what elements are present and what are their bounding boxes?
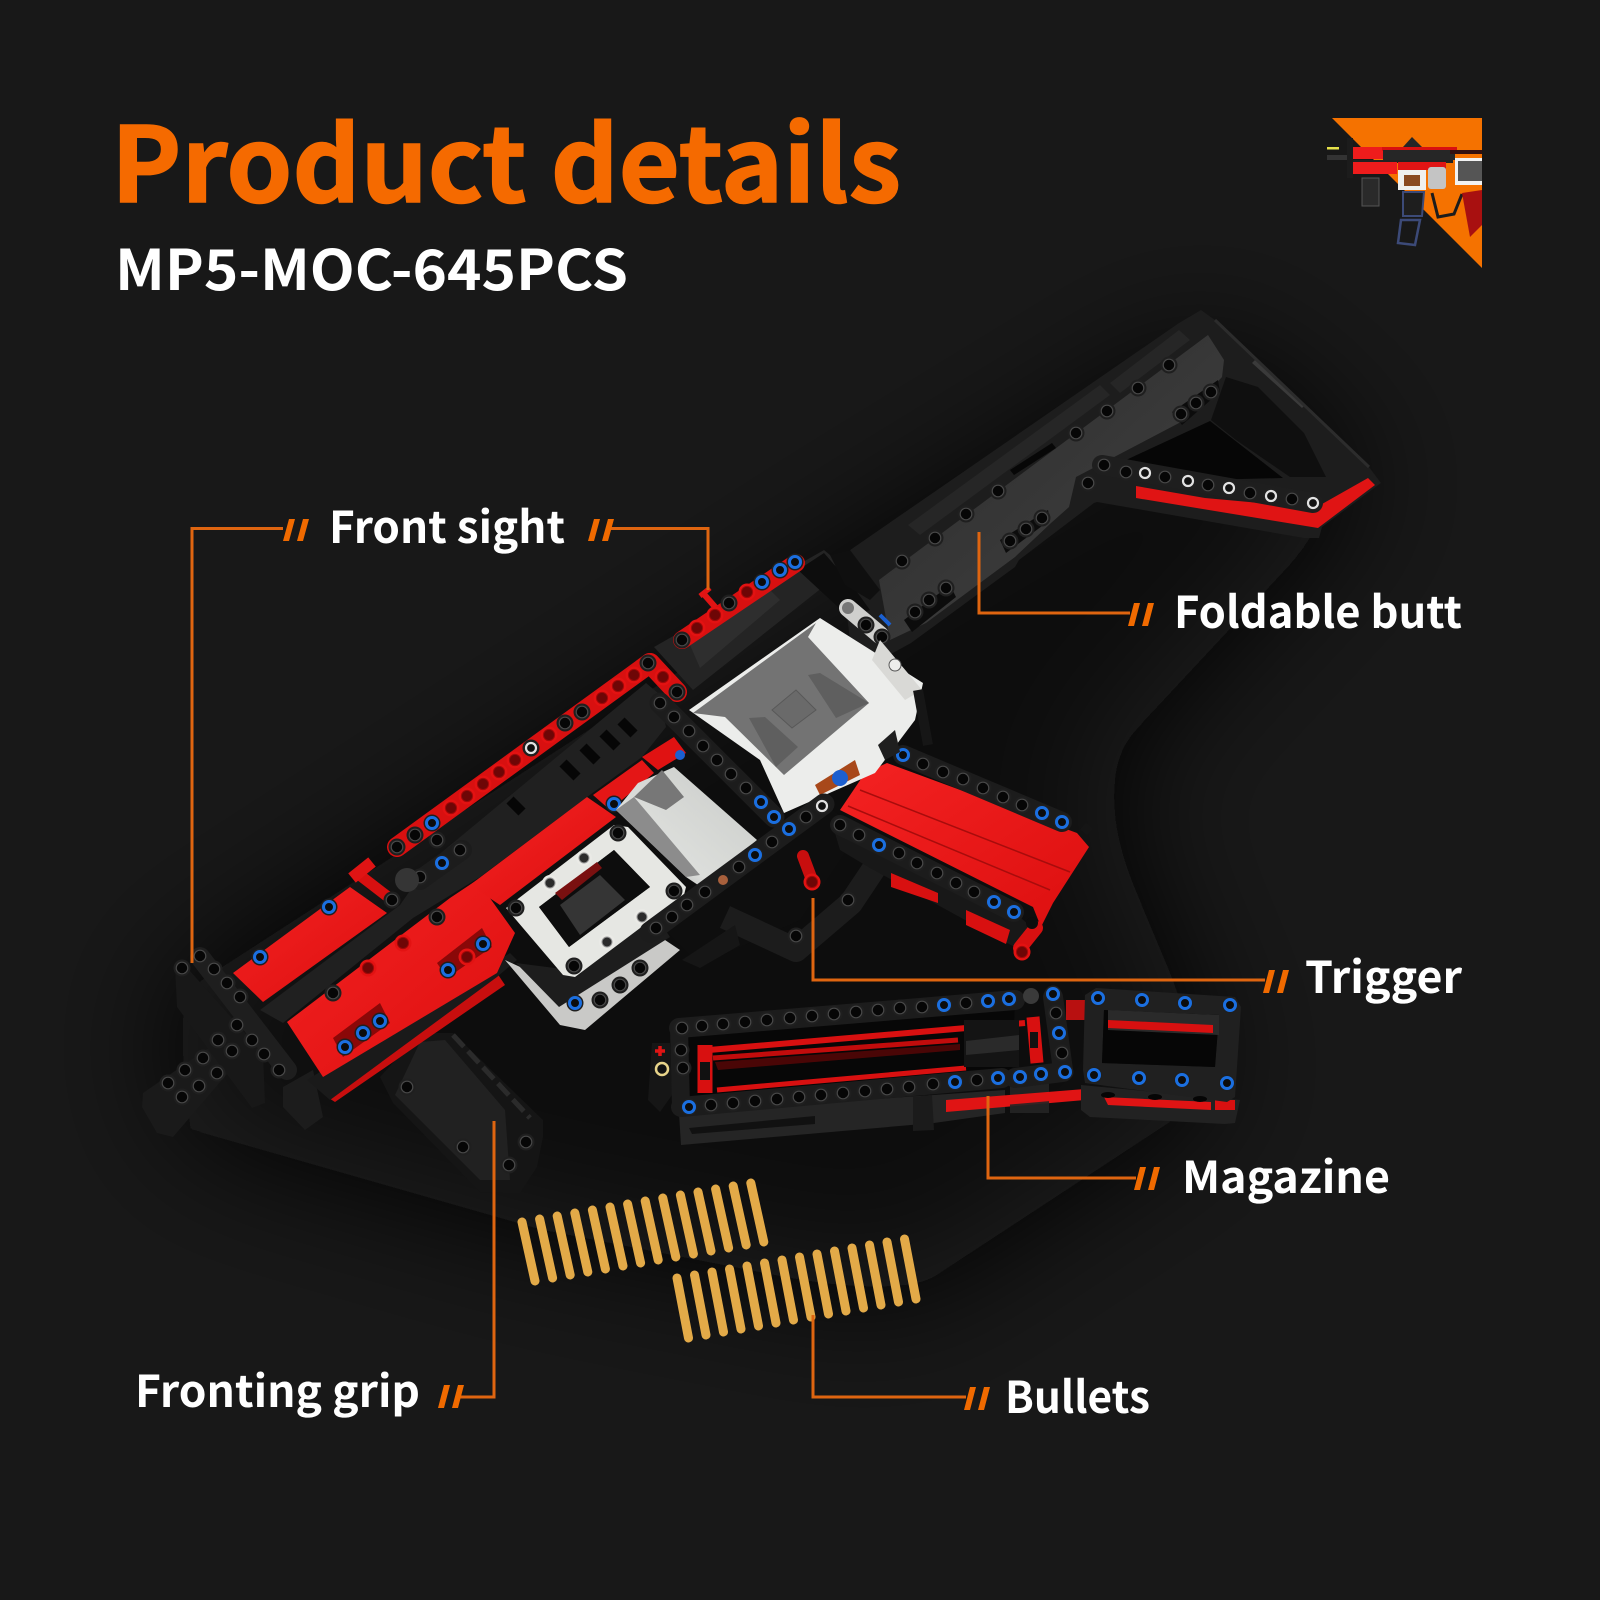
pin bracket above battery — [842, 602, 928, 745]
red rear body — [470, 737, 686, 905]
callout: Fronting grip — [135, 1121, 494, 1420]
callout: Bullets — [813, 1315, 1150, 1426]
callout: Magazine — [988, 1096, 1390, 1206]
lower diagonal beam — [648, 798, 830, 936]
callout: Trigger: Trigger — [1305, 942, 1463, 1006]
callout: Front sight: Front sight — [329, 492, 565, 556]
motor cylinder — [616, 767, 757, 887]
callout: Front sight — [192, 492, 708, 963]
callout: Fronting grip: Fronting grip — [135, 1356, 420, 1420]
bullets — [522, 1183, 916, 1338]
red handguard lower — [252, 880, 515, 1077]
battery side beam — [652, 694, 782, 826]
callout: Foldable butt — [979, 532, 1462, 641]
red connector, ball and side beam — [352, 832, 468, 908]
rail windows — [510, 721, 634, 812]
callout: Magazine: Magazine — [1182, 1142, 1390, 1206]
red handguard upper — [233, 887, 387, 1002]
magazine plus pin — [655, 1046, 668, 1075]
dark rail — [260, 683, 666, 1023]
subtitle: MP5-MOC-645PCS — [115, 226, 628, 307]
battery box — [689, 618, 923, 813]
callout: Foldable butt: Foldable butt — [1174, 577, 1462, 641]
callout: Trigger — [813, 898, 1463, 1006]
joint at stock — [830, 550, 880, 600]
magazine right frame — [1081, 988, 1241, 1124]
under-body light beam — [505, 907, 680, 1030]
stock red strut — [1096, 456, 1375, 528]
front sight — [700, 588, 716, 608]
foldable stock — [840, 310, 1381, 660]
pistol grip — [832, 746, 1090, 960]
callout: Bullets: Bullets — [1005, 1362, 1150, 1426]
trigger guard — [660, 804, 875, 968]
foregrip — [380, 1014, 543, 1193]
background shadow — [170, 340, 1370, 1300]
front block and barrel — [142, 948, 323, 1137]
title: Product details — [111, 81, 901, 232]
white frame — [506, 824, 686, 977]
red top beam — [388, 554, 804, 856]
magazine — [648, 986, 1241, 1145]
upper receiver band — [654, 550, 842, 690]
trigger — [803, 856, 820, 890]
lower strip and red underside — [327, 973, 505, 1102]
gun body — [142, 550, 1090, 1193]
thumbnail icon: orange triangle with mini gun — [1327, 118, 1482, 268]
